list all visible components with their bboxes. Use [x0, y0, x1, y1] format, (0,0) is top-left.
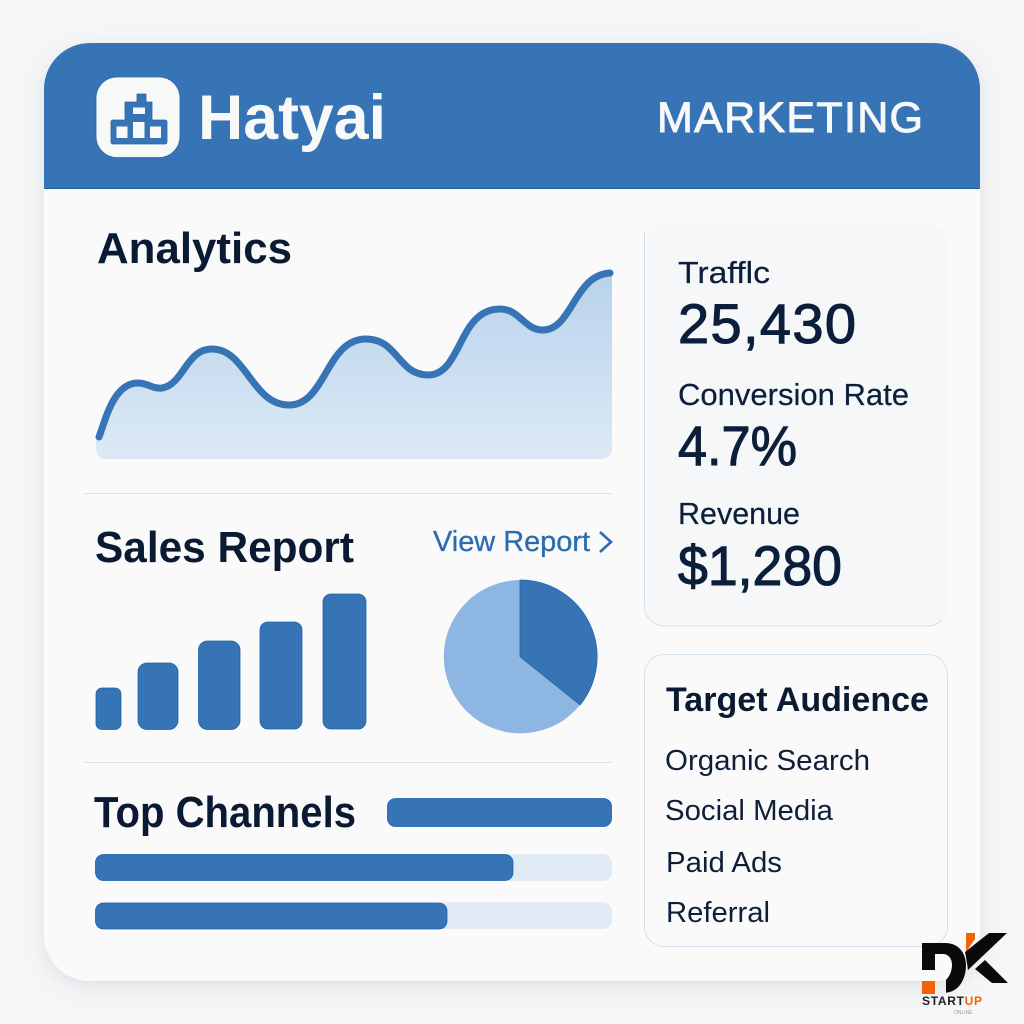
- brand name: Hatyai: [198, 83, 386, 153]
- bar: top channel: [388, 798, 612, 826]
- header band: [44, 43, 980, 188]
- heading: sales report: Sales Report: [95, 523, 354, 572]
- metric: traffic: 25,430: [678, 292, 856, 355]
- panel: target audience: [644, 654, 948, 946]
- list: audience: Organic Search: [665, 745, 870, 777]
- panel: metrics: [644, 225, 948, 626]
- section label: MARKETING: [657, 94, 923, 142]
- metric: conversion rate: 4.7%: [678, 414, 797, 477]
- heading: target audience: Target Audience: [666, 681, 929, 719]
- link: view report: View Report: [433, 526, 590, 558]
- pie chart: [444, 580, 597, 733]
- area chart: [96, 273, 612, 459]
- metric: revenue: [678, 496, 842, 597]
- list: audience: Paid Ads: [666, 847, 782, 879]
- bar chart: [96, 594, 366, 730]
- heading: analytics: Analytics: [97, 224, 292, 273]
- metric: revenue: Revenue: [678, 496, 800, 531]
- metric: conversion rate: Conversion Rate: [678, 377, 909, 412]
- list: audience: Social Media: [665, 795, 834, 827]
- metric: traffic: Trafflc: [678, 255, 770, 290]
- icon: chevron: [600, 532, 611, 552]
- logo: DK startup: ONLINE: [954, 1010, 973, 1016]
- list: audience: Referral: [666, 897, 770, 929]
- logo: DK startup: STARTUP: [922, 994, 982, 1008]
- metric: traffic: [678, 255, 856, 355]
- icon: logo: [96, 77, 180, 158]
- logo: DK startup: [922, 933, 1008, 1016]
- list: audience: [665, 745, 870, 929]
- heading: top channels: Top Channels: [94, 788, 356, 837]
- progress bar: second: [95, 902, 612, 929]
- metric: revenue: $1,280: [678, 534, 842, 597]
- metric: conversion rate: [678, 377, 909, 477]
- progress bar: first: [95, 854, 612, 881]
